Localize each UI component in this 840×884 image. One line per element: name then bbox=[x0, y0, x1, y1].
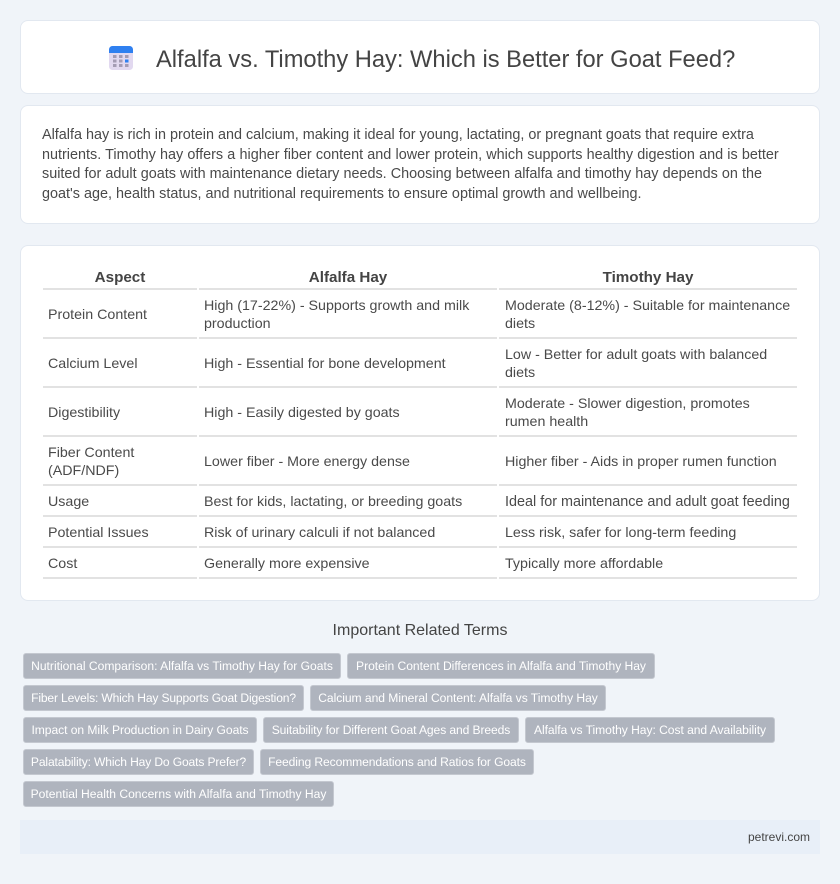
row: cost: Typically more affordable bbox=[505, 556, 663, 572]
intro text: goat's age, health status, and nutritional requirements to ensure optimal growth and wellbeing. bbox=[42, 186, 642, 202]
row: protein content: High (17-22%) - Supports growth and milk bbox=[204, 298, 469, 314]
related term tags: Fiber Levels: Which Hay Supports Goat Digestion? bbox=[31, 691, 296, 705]
related term tags bbox=[23, 653, 775, 807]
row: potential issues: Potential Issues bbox=[48, 525, 149, 541]
row: cost: Cost bbox=[48, 556, 77, 572]
heading: important related terms: Important Related Terms bbox=[333, 622, 507, 639]
related term tags: Nutritional Comparison: Alfalfa vs Timothy Hay for Goats bbox=[31, 659, 333, 673]
intro text: nutrients. Timothy hay offers a higher fiber content and lower protein, which supports healthy digestion and is better bbox=[42, 146, 779, 162]
row: calcium level: diets bbox=[505, 365, 535, 381]
row: usage bbox=[48, 494, 790, 510]
row: potential issues: Less risk, safer for long-term feeding bbox=[505, 525, 736, 541]
row: fiber content: Higher fiber - Aids in proper rumen function bbox=[505, 454, 777, 470]
related term tags: Feeding Recommendations and Ratios for Goats bbox=[268, 755, 526, 769]
row: digestibility: Digestibility bbox=[48, 405, 120, 421]
column headers: Alfalfa Hay bbox=[309, 269, 387, 286]
panel: comparison table bbox=[20, 245, 820, 601]
row: digestibility: rumen health bbox=[505, 414, 588, 430]
intro text: Alfalfa hay is rich in protein and calcium, making it ideal for young, lactating, or pregnant goats that require extra bbox=[42, 127, 754, 143]
row: digestibility: Moderate - Slower digestion, promotes bbox=[505, 396, 750, 412]
row: calcium level: Calcium Level bbox=[48, 356, 138, 372]
related term tags: Impact on Milk Production in Dairy Goats bbox=[31, 723, 249, 737]
panel: intro bbox=[20, 105, 820, 224]
footer bar bbox=[20, 820, 820, 854]
related term tags: Alfalfa vs Timothy Hay: Cost and Availability bbox=[534, 723, 766, 737]
row: cost bbox=[48, 556, 663, 572]
footer credit: petrevi.com bbox=[748, 830, 810, 844]
icon: calendar bbox=[109, 46, 133, 70]
related term tags: Potential Health Concerns with Alfalfa and Timothy Hay bbox=[31, 787, 326, 801]
row: cost: Generally more expensive bbox=[204, 556, 370, 572]
row: protein content: production bbox=[204, 316, 271, 332]
row: protein content: Protein Content bbox=[48, 307, 147, 323]
row: usage: Ideal for maintenance and adult goat feeding bbox=[505, 494, 790, 510]
related term tags: Palatability: Which Hay Do Goats Prefer? bbox=[31, 755, 246, 769]
row: calcium level: High - Essential for bone development bbox=[204, 356, 446, 372]
related term tags: Suitability for Different Goat Ages and Breeds bbox=[272, 723, 510, 737]
related term tags: Protein Content Differences in Alfalfa and Timothy Hay bbox=[356, 659, 646, 673]
row: protein content bbox=[48, 298, 790, 332]
row: calcium level: Low - Better for adult goats with balanced bbox=[505, 347, 767, 363]
row: protein content: Moderate (8-12%) - Suitable for maintenance bbox=[505, 298, 790, 314]
row: calcium level bbox=[48, 347, 767, 381]
row: usage: Best for kids, lactating, or breeding goats bbox=[204, 494, 462, 510]
column headers: Aspect bbox=[95, 269, 145, 286]
row: fiber content: Fiber Content bbox=[48, 445, 134, 461]
related term tags: Calcium and Mineral Content: Alfalfa vs Timothy Hay bbox=[318, 691, 598, 705]
row: usage: Usage bbox=[48, 494, 89, 510]
column headers bbox=[95, 269, 694, 286]
intro text: suited for adult goats with maintenance dietary needs. Choosing between alfalfa and timothy hay depends on the bbox=[42, 166, 762, 182]
title: Alfalfa vs. Timothy Hay: Which is Better for Goat Feed? bbox=[156, 47, 735, 73]
intro text bbox=[42, 127, 779, 202]
row: fiber content: Lower fiber - More energy dense bbox=[204, 454, 410, 470]
row: fiber content bbox=[48, 445, 777, 479]
header panel bbox=[20, 20, 820, 94]
row: fiber content: (ADF/NDF) bbox=[48, 463, 119, 479]
row: digestibility bbox=[48, 396, 750, 430]
row: protein content: diets bbox=[505, 316, 535, 332]
comparison table bbox=[43, 269, 797, 579]
row: digestibility: High - Easily digested by goats bbox=[204, 405, 400, 421]
row: potential issues: Risk of urinary calculi if not balanced bbox=[204, 525, 435, 541]
column headers: Timothy Hay bbox=[603, 269, 693, 286]
row: potential issues bbox=[48, 525, 736, 541]
